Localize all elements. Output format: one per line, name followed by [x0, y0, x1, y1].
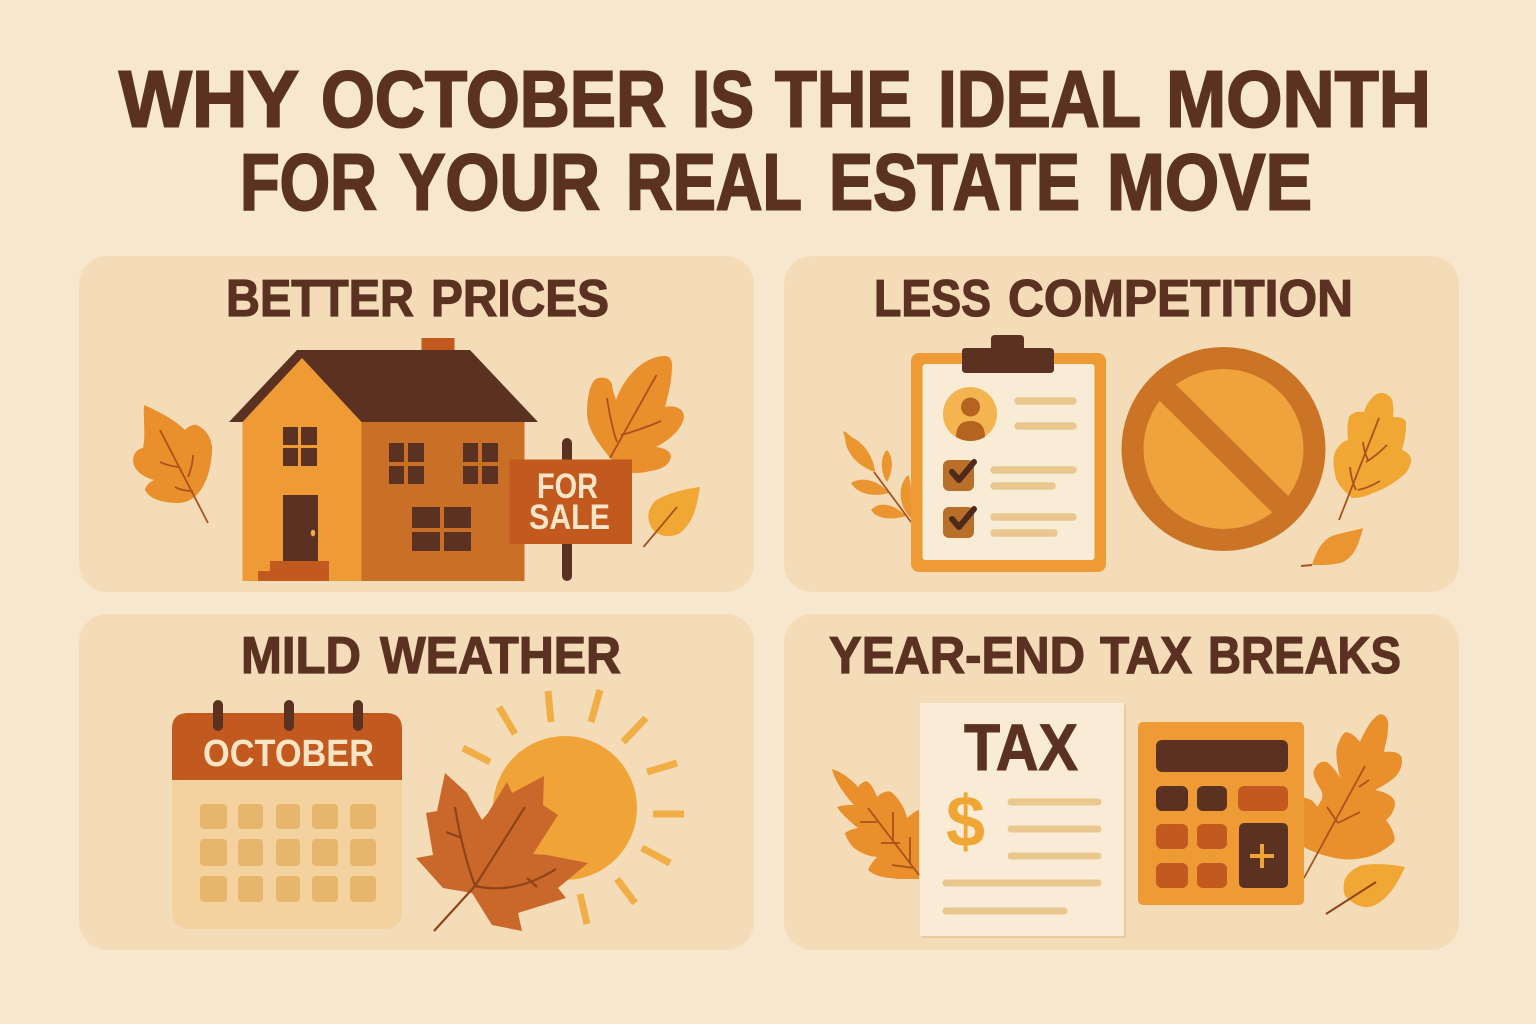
icon: calendar: OCTOBER — [203, 733, 374, 775]
heading: less competition: LESS — [874, 270, 991, 328]
panel: less competition — [784, 256, 1459, 592]
title: MONTH — [1166, 54, 1431, 144]
title: THE — [775, 54, 912, 144]
icon: small leaf — [644, 487, 700, 547]
heading: year-end tax breaks — [829, 627, 1401, 685]
icon: maple leaf — [416, 773, 588, 931]
heading: better prices — [226, 270, 609, 328]
title: YOUR — [399, 138, 600, 226]
icon: for sale sign: SALE — [529, 498, 610, 537]
heading: year-end tax breaks: BREAKS — [1208, 627, 1401, 685]
icon: bottom leaf — [1301, 528, 1363, 566]
title: OCTOBER — [321, 54, 666, 144]
heading: better prices: BETTER — [226, 270, 414, 328]
title: WHY — [119, 54, 299, 144]
icon: clipboard checklist — [911, 335, 1106, 572]
icon: tax document: $ — [946, 782, 985, 862]
icon: calculator — [1138, 722, 1304, 905]
panel: year-end tax breaks — [784, 614, 1459, 950]
heading: year-end tax breaks: TAX — [1100, 627, 1192, 685]
icon: house — [229, 338, 538, 581]
icon: for sale sign: FOR — [537, 467, 598, 506]
icon: sun — [463, 690, 684, 924]
icon: tax document: TAX — [964, 710, 1078, 784]
heading: less competition: COMPETITION — [1008, 270, 1353, 328]
icon: tax document — [920, 703, 1126, 938]
title: IDEAL — [938, 54, 1141, 144]
title: FOR — [240, 138, 377, 226]
heading: mild weather: MILD — [241, 627, 361, 685]
icon: right leaf — [1334, 393, 1411, 520]
heading: less competition — [874, 270, 1353, 328]
icon: left oak leaf — [832, 769, 919, 879]
title — [119, 54, 1431, 226]
title: REAL — [626, 138, 802, 226]
icon: large leaf — [587, 356, 684, 473]
heading: mild weather — [241, 627, 621, 685]
icon: no symbol — [1132, 358, 1314, 540]
icon: calendar — [172, 705, 402, 929]
icon: for sale sign — [510, 438, 632, 581]
heading: year-end tax breaks: YEAR-END — [829, 627, 1085, 685]
icon: left leaf — [133, 405, 212, 523]
panel: better prices — [79, 256, 754, 592]
heading: better prices: PRICES — [431, 270, 609, 328]
title: MOVE — [1107, 138, 1312, 226]
title: ESTATE — [829, 138, 1080, 226]
icon: small yellow leaf — [1326, 864, 1405, 914]
panel: mild weather — [79, 614, 754, 950]
title: IS — [692, 54, 754, 144]
heading: mild weather: WEATHER — [380, 627, 621, 685]
icon: right oak leaf — [1304, 714, 1402, 878]
icon: left branch leaves — [843, 431, 912, 522]
